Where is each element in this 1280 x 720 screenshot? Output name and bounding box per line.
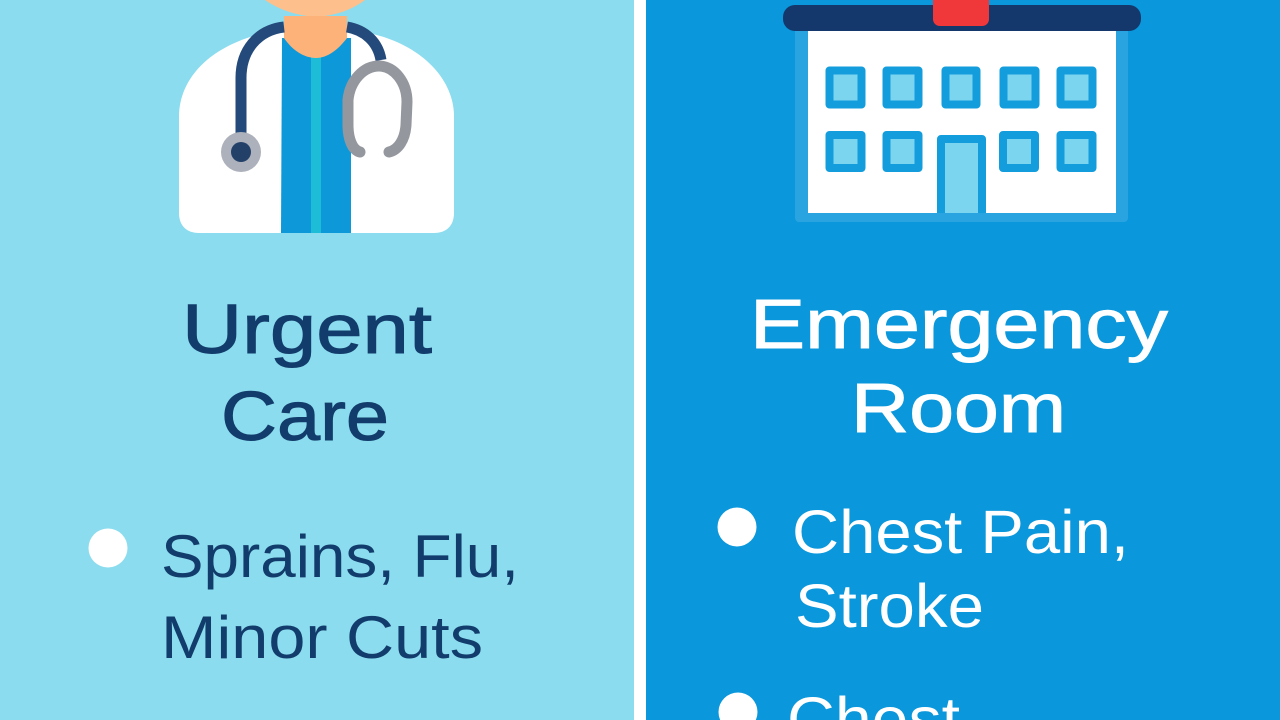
neck <box>284 16 347 58</box>
doctor chin <box>265 0 365 17</box>
heading: emergency room <box>750 285 1168 447</box>
upper windows <box>830 70 1092 104</box>
building wall <box>808 28 1116 213</box>
scrubs centre stripe <box>311 50 321 233</box>
heading: emergency room: Room <box>851 369 1066 447</box>
list item: chest pain, stroke: Stroke <box>795 572 984 640</box>
stethoscope chest piece <box>221 132 261 172</box>
stethoscope tube <box>241 27 284 136</box>
panel: emergency room <box>646 0 1280 720</box>
list item: chest pain, stroke <box>718 498 1129 640</box>
list item: sprains, flu, minor cuts: Minor Cuts <box>161 604 483 671</box>
door <box>941 139 982 213</box>
building outline <box>795 25 1128 222</box>
scrubs <box>281 38 351 233</box>
list item: chest <box>718 685 960 720</box>
stethoscope earpiece <box>348 66 407 152</box>
list item: chest pain, stroke: Chest Pain, <box>792 498 1129 566</box>
white coat <box>179 30 454 233</box>
heading: emergency room: Emergency <box>750 285 1168 363</box>
list item: sprains, flu, minor cuts: Sprains, Flu, <box>161 523 519 590</box>
icon: doctor <box>179 0 454 233</box>
panel: urgent care <box>0 0 634 720</box>
heading: urgent care: Urgent <box>182 290 432 368</box>
list item: sprains, flu, minor cuts <box>88 523 519 671</box>
heading: urgent care: Care <box>221 377 389 455</box>
lower windows <box>830 135 1092 168</box>
roof <box>783 5 1141 31</box>
red cross block <box>933 0 989 26</box>
heading: urgent care <box>182 290 432 455</box>
icon: hospital <box>783 0 1141 222</box>
